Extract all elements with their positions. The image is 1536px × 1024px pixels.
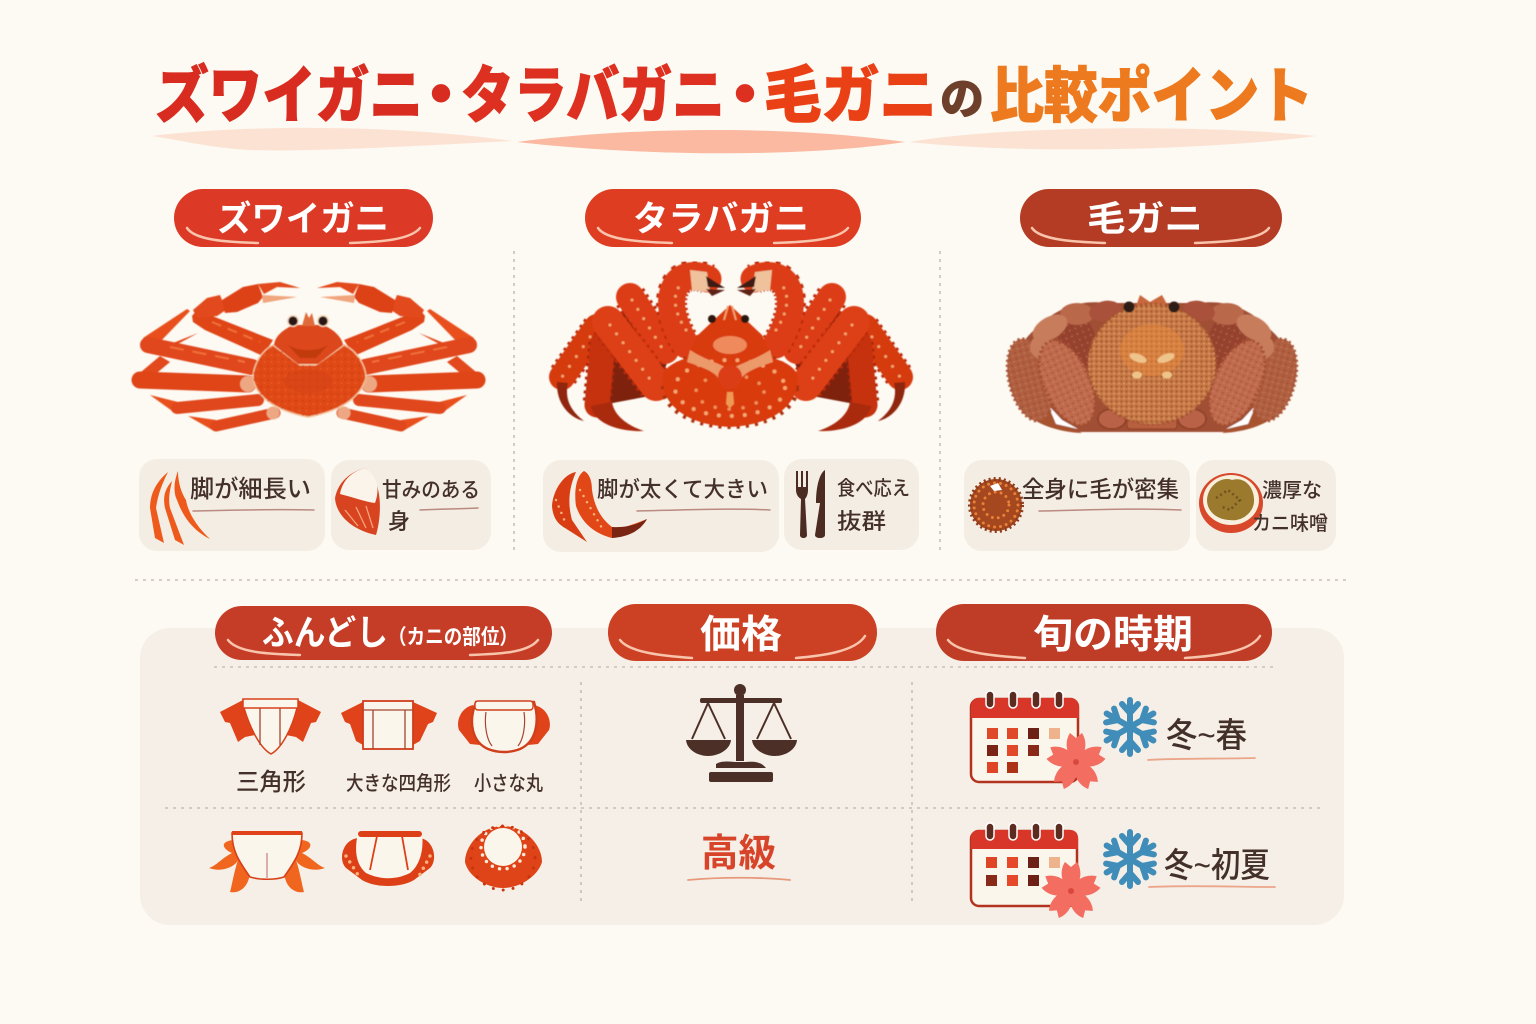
pill: ズワイガニ: [174, 189, 433, 247]
icon: fork and knife: [796, 470, 825, 538]
pill: タラバガニ: [585, 189, 861, 247]
title: [155, 61, 1313, 131]
panel: 甘みのある身: 甘みのある: [382, 479, 480, 502]
pill: 旬の時期: [936, 604, 1272, 661]
icon: crab meat: [335, 468, 380, 535]
illustration: hairy crab: [999, 295, 1305, 433]
icon: snowflake: [1103, 700, 1157, 754]
pill: ふんどし: [215, 606, 552, 660]
icon: small round apron: [458, 701, 550, 752]
title: タラバガニ: [461, 62, 725, 131]
panel: 甘みのある身: 身: [388, 509, 410, 534]
pill: 価格: 価格: [700, 614, 782, 657]
pill: ズワイガニ: ズワイガニ: [217, 199, 389, 239]
title: ズワイガニ: [155, 61, 423, 131]
panel: 甘みのある身: [331, 460, 491, 550]
panel: 脚が太くて大きい: [543, 460, 779, 552]
icon: slender legs: [150, 471, 210, 545]
text: 高級: [688, 833, 790, 880]
pill: 価格: [608, 604, 877, 661]
label: 大きな四角形: 大きな四角形: [346, 772, 451, 795]
panel: 脚が細長い: [139, 459, 325, 551]
panel: 全身に毛が密集: 全身に毛が密集: [1022, 476, 1179, 502]
title: ・: [410, 62, 472, 131]
pill: ふんどし: ふんどし: [262, 614, 388, 653]
icon: balance scale: [686, 684, 797, 782]
panel: 濃厚なカニ味噌: [1196, 460, 1336, 551]
icon: thick claw: [552, 471, 647, 542]
panel: 全身に毛が密集: [964, 460, 1190, 551]
icon: snowflake: [1103, 832, 1157, 886]
icon: wide apron: [342, 831, 434, 886]
panel: 食べ応え抜群: 食べ応え: [837, 477, 910, 500]
panel: 脚が太くて大きい: 脚が太くて大きい: [597, 477, 768, 502]
title: ・: [714, 62, 776, 131]
icon: round spiny apron: [465, 825, 542, 890]
label: 三角形: 三角形: [236, 769, 306, 796]
text: 高級: 高級: [701, 833, 776, 875]
icon: large square apron: [341, 701, 437, 749]
icon: crab miso shell: [1199, 473, 1263, 533]
panel: 食べ応え抜群: 抜群: [837, 509, 886, 534]
title: の: [940, 75, 984, 124]
panel: 濃厚なカニ味噌: 濃厚な: [1262, 479, 1322, 502]
illustration: snow crab: [135, 282, 482, 431]
panel: 濃厚なカニ味噌: カニ味噌: [1252, 512, 1328, 535]
pill: ふんどし: （カニの部位）: [388, 626, 518, 649]
icon: slim apron: [209, 831, 325, 892]
text: 冬〜春: 冬~春: [1166, 717, 1247, 755]
illustration: king crab: [557, 270, 905, 431]
title: 毛ガニ: [764, 62, 937, 131]
icon: triangle apron: [220, 699, 321, 754]
text: 冬〜初夏: 冬~初夏: [1164, 847, 1270, 885]
pill: 毛ガニ: [1020, 189, 1282, 247]
icon: hairy shell: [970, 479, 1022, 531]
panel: 食べ応え抜群: [784, 459, 919, 550]
icon: calendar winter–early summer: [971, 823, 1101, 920]
pill: タラバガニ: タラバガニ: [633, 200, 809, 239]
title ribbon: [152, 128, 1316, 153]
pill: 旬の時期: 旬の時期: [1033, 614, 1193, 657]
panel: 脚が細長い: 脚が細長い: [190, 476, 311, 503]
title: 比較ポイント: [990, 63, 1313, 130]
pill: 毛ガニ: 毛ガニ: [1087, 200, 1203, 239]
icon: calendar winter–spring: [971, 691, 1106, 791]
panel: comparison table: [140, 628, 1344, 925]
label: 小さな丸: 小さな丸: [474, 772, 543, 795]
